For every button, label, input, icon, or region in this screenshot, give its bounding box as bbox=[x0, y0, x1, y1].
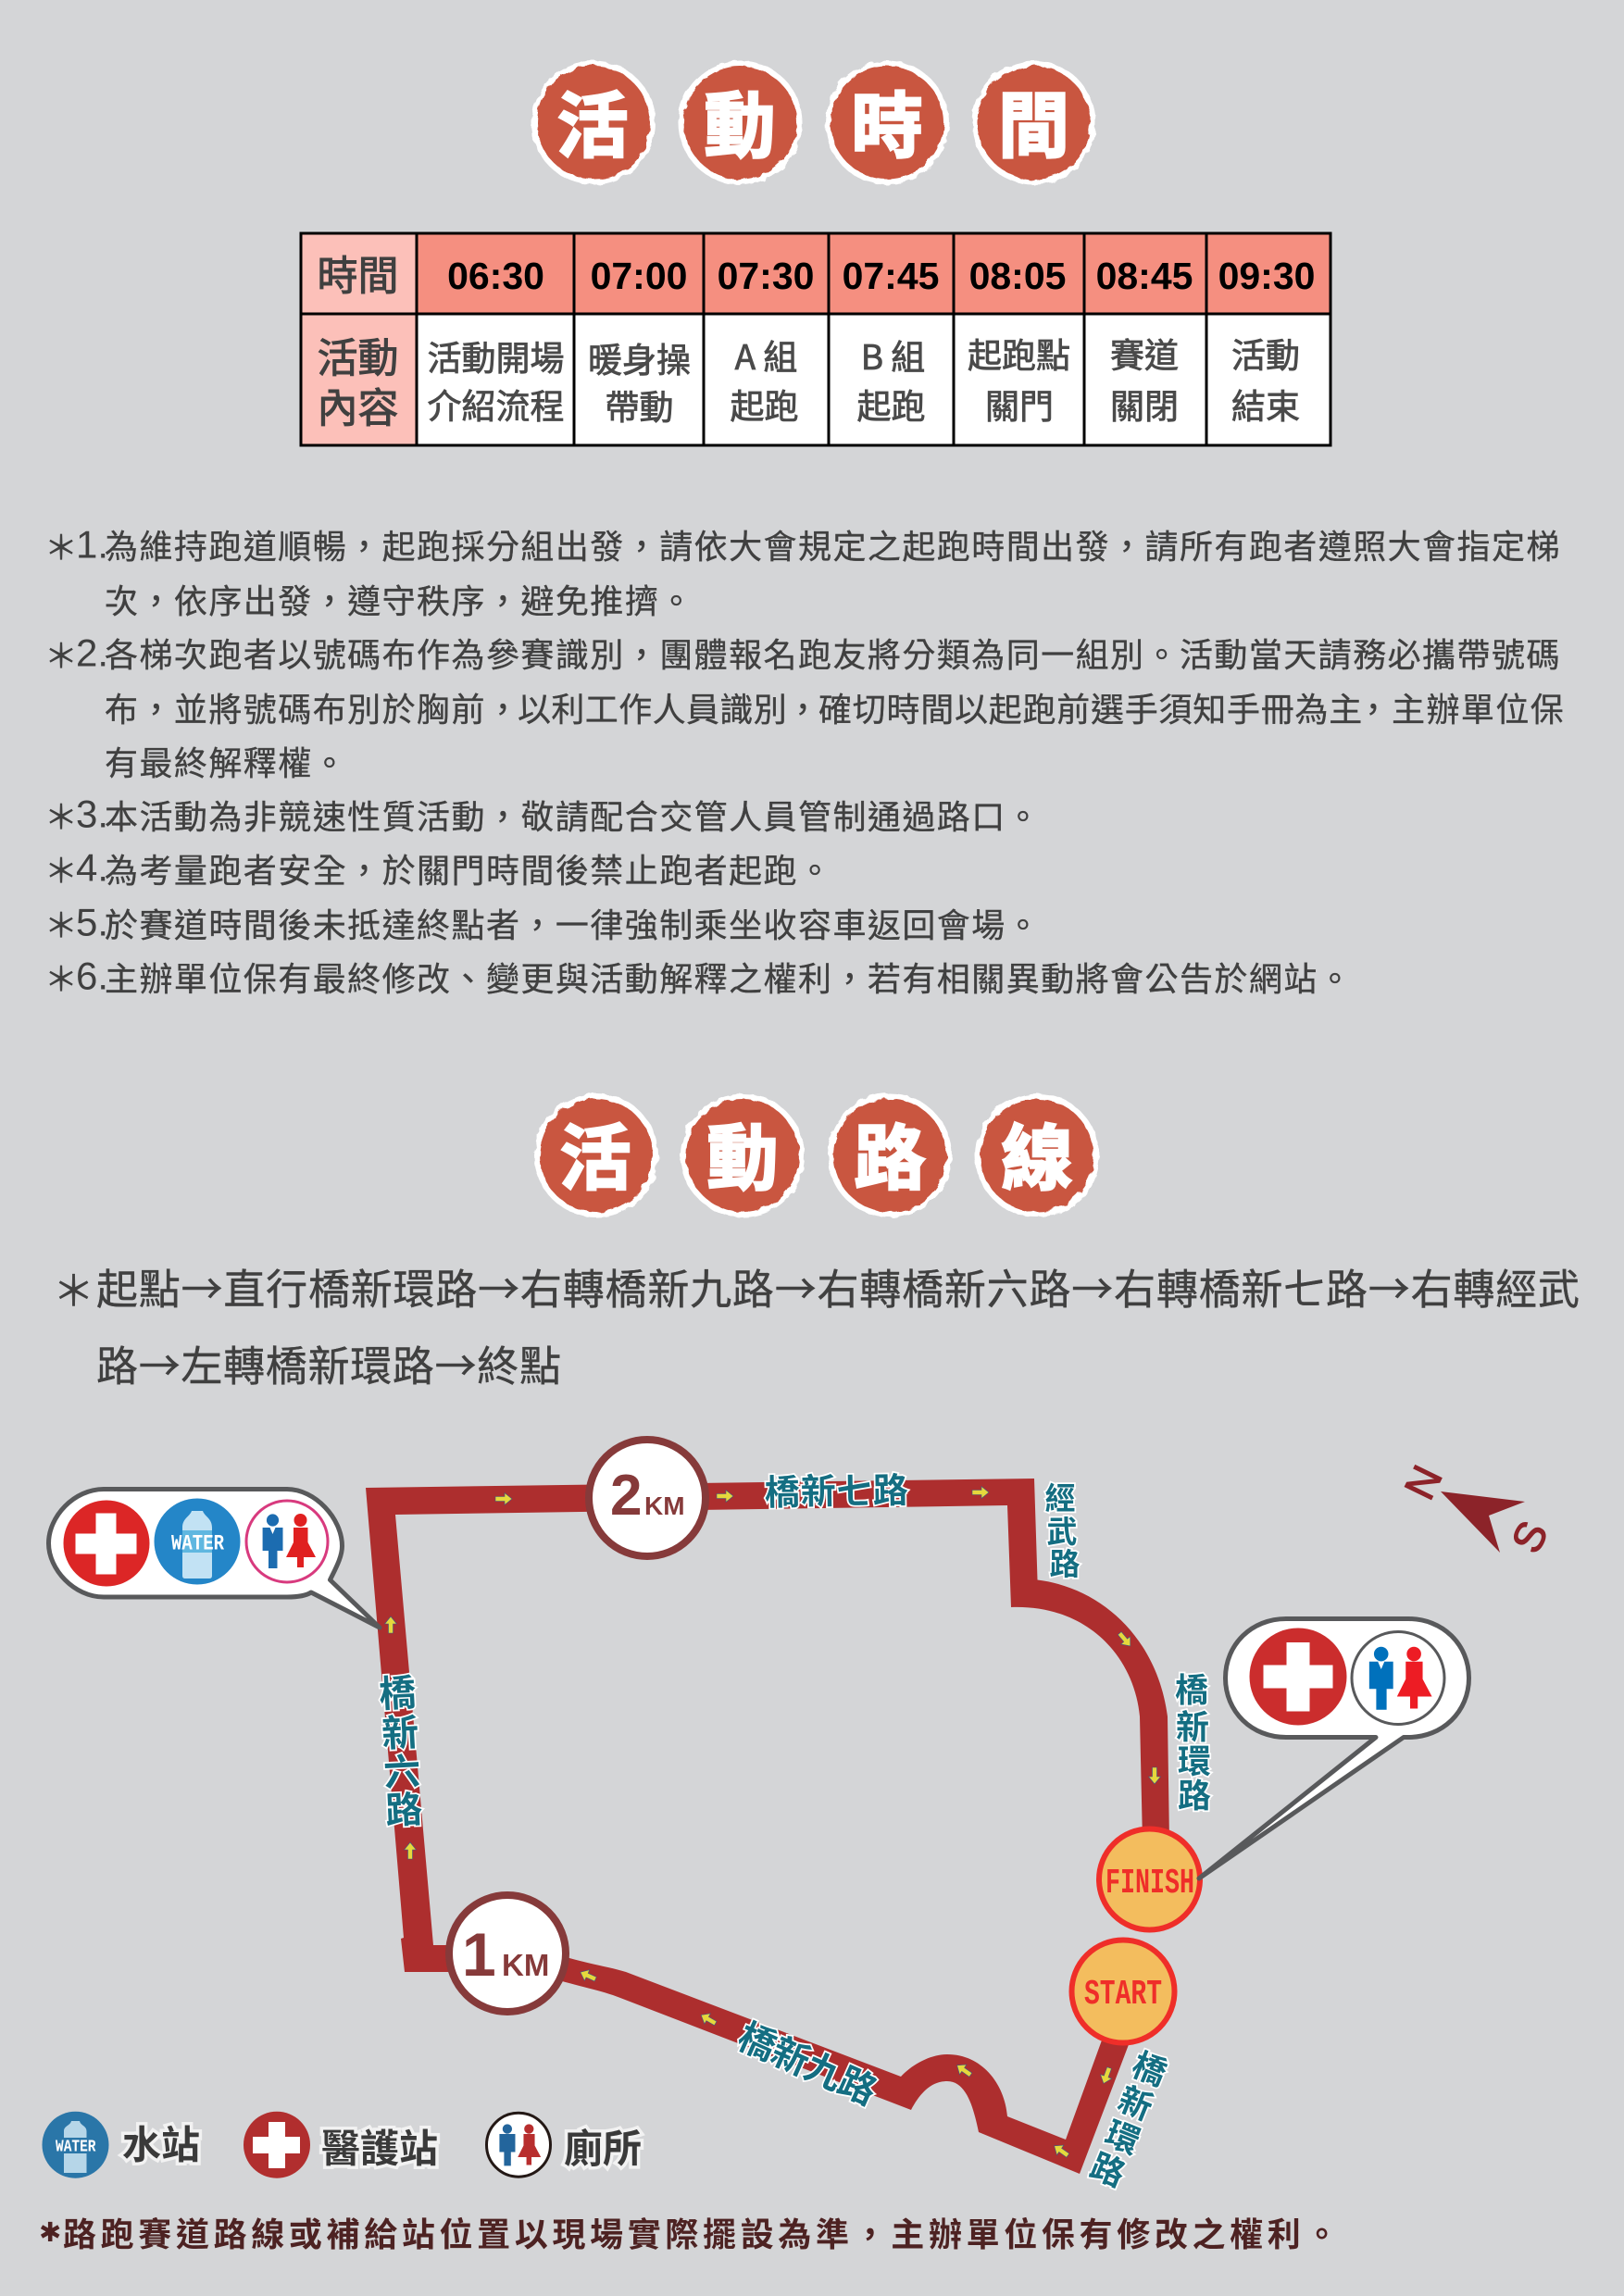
legend: medical station: 醫護站 bbox=[321, 2118, 438, 2174]
rules text block: 4. bbox=[76, 846, 108, 889]
rules text block: ＊ bbox=[44, 630, 79, 678]
icon: toilet bbox=[246, 1501, 328, 1582]
table times row: 09:30 bbox=[1218, 255, 1315, 297]
table activities row: 介紹流程 bbox=[428, 379, 565, 429]
table times row: 08:45 bbox=[1096, 255, 1193, 297]
rules text block: 確切時間以起跑前選手須知手冊為主 bbox=[818, 683, 1363, 731]
direction arrows bbox=[385, 1487, 1161, 2160]
rules text block: ＊ bbox=[44, 899, 79, 947]
schedule table bbox=[301, 233, 1331, 445]
table activities row: 帶動 bbox=[606, 380, 674, 430]
rules text block: 1. bbox=[76, 522, 108, 567]
title: 活動時間: 間 bbox=[998, 70, 1069, 172]
table header: 時間: 時間 bbox=[317, 243, 398, 302]
rules text block: 布，並將號碼布別於胸前， bbox=[105, 683, 520, 731]
marker: start bbox=[1072, 1940, 1174, 2042]
rules text block: 為維持跑道順暢，起跑採分組出發，請依大會規定之起跑時間出發，請所有跑者遵照大會指定梯 bbox=[105, 520, 1561, 568]
rules text block: 有最終解釋權。 bbox=[105, 737, 347, 785]
rules text block: ＊ bbox=[44, 953, 79, 1001]
marker: 2 km bbox=[589, 1440, 706, 1556]
rules text block: 次，依序出發，遵守秩序，避免推擠。 bbox=[105, 575, 694, 623]
marker: 1 km bbox=[449, 1895, 566, 2012]
legend: water station bbox=[43, 2112, 200, 2178]
table times row: 06:30 bbox=[447, 255, 544, 297]
road label: 橋新七路: 橋新七路 bbox=[764, 1462, 908, 1515]
rules text block: ， bbox=[786, 683, 820, 731]
rules text block: ， bbox=[1356, 683, 1391, 731]
table activities row: 活動開場 bbox=[428, 331, 565, 381]
marker: finish: FINISH bbox=[1106, 1864, 1194, 1903]
callout: medical, toilet bbox=[1199, 1618, 1468, 1878]
legend: toilet: 廁所 bbox=[564, 2118, 642, 2174]
route description text bbox=[53, 1255, 1580, 1392]
rules text block: ＊ bbox=[44, 791, 79, 839]
rules text block: 為考量跑者安全，於關門時間後禁止跑者起跑。 bbox=[105, 844, 832, 892]
table activities row: 起跑 bbox=[730, 379, 798, 429]
marker: 2 km: KM bbox=[644, 1491, 685, 1520]
table times row: 08:05 bbox=[969, 255, 1066, 297]
footnote: ✱ bbox=[39, 2216, 61, 2248]
road label: 橋新九路: 橋新九路 bbox=[731, 2007, 886, 2115]
rules text block: ＊ bbox=[44, 521, 79, 569]
legend: water station: WATER bbox=[56, 2139, 96, 2157]
route description text: ＊ bbox=[53, 1257, 94, 1318]
table times row bbox=[447, 255, 1315, 297]
marker: 2 km: 2 bbox=[610, 1464, 642, 1528]
rules text block: 6. bbox=[76, 954, 108, 998]
compass bbox=[1394, 1458, 1557, 1560]
title: 活動路線 bbox=[534, 1093, 1099, 1217]
title: 活動時間: 活 bbox=[557, 70, 628, 172]
rules text block: 於賽道時間後未抵達終點者，一律強制乘坐收容車返回會場。 bbox=[105, 899, 1041, 947]
icon: medical cross bbox=[63, 1500, 150, 1587]
rules text block: 各梯次跑者以號碼布作為參賽識別，團體報名跑友將分類為同一組別。活動當天請務必攜帶號碼 bbox=[105, 629, 1561, 677]
table activities row: 賽道 bbox=[1110, 328, 1179, 378]
compass: S bbox=[1502, 1514, 1557, 1560]
legend: toilet bbox=[487, 2113, 642, 2177]
icon: medical cross bbox=[1250, 1628, 1346, 1726]
table activities row: 關閉 bbox=[1110, 379, 1179, 429]
road label: 經武路: 經武路 bbox=[1044, 1474, 1080, 1584]
table times row: 07:30 bbox=[718, 255, 814, 297]
table header: 活動內容 bbox=[317, 325, 398, 434]
table activities row: 關門 bbox=[985, 379, 1054, 429]
table activities row: 起跑 bbox=[857, 379, 926, 429]
compass: N bbox=[1394, 1458, 1452, 1506]
legend: water station: 水站 bbox=[122, 2115, 200, 2170]
rules text block: 主辦單位保 bbox=[1392, 683, 1565, 731]
table times row: 07:45 bbox=[843, 255, 939, 297]
table activities row: A 組 bbox=[735, 330, 797, 380]
table activities row: 起跑點 bbox=[968, 328, 1070, 378]
table activities row: B 組 bbox=[861, 330, 925, 380]
road label: 橋新環路 (finish side): 橋新環路 bbox=[1175, 1664, 1211, 1817]
title: 活動路線: 線 bbox=[1002, 1102, 1072, 1205]
marker: 1 km: KM bbox=[502, 1948, 549, 1982]
callout: medical, water, toilet bbox=[48, 1489, 380, 1628]
icon: water bottle bbox=[154, 1498, 241, 1585]
rules text block: 主辦單位保有最終修改、變更與活動解釋之權利，若有相關異動將會公告於網站。 bbox=[105, 953, 1353, 1001]
legend: medical station bbox=[244, 2112, 438, 2178]
table activities row: 結束 bbox=[1231, 379, 1300, 429]
route description text: 路→左轉橋新環路→終點 bbox=[96, 1333, 561, 1392]
rules text block: 3. bbox=[76, 792, 108, 835]
table activities row: 活動 bbox=[1231, 328, 1300, 378]
road label: 橋新六路: 橋新六路 bbox=[378, 1663, 424, 1835]
road label: 橋新環路 (start side): 橋新環路 bbox=[1084, 2039, 1175, 2197]
title: 活動時間: 時 bbox=[852, 70, 922, 172]
marker: start: START bbox=[1084, 1975, 1162, 2015]
table header: 活動內容: 內容 bbox=[317, 375, 398, 434]
title: 活動時間 bbox=[531, 61, 1096, 185]
rules text block: 5. bbox=[76, 900, 108, 944]
icon: water bottle: WATER bbox=[171, 1531, 224, 1555]
route description text: 起點→直行橋新環路→右轉橋新九路→右轉橋新六路→右轉橋新七路→右轉經武 bbox=[96, 1255, 1580, 1316]
table activities row bbox=[428, 328, 1300, 430]
marker: finish bbox=[1099, 1829, 1200, 1929]
route map line bbox=[366, 1479, 1169, 2174]
rules text block: ＊ bbox=[44, 844, 79, 892]
title: 活動時間: 動 bbox=[704, 70, 776, 172]
table header: 活動內容: 活動 bbox=[317, 325, 398, 384]
title: 活動路線: 路 bbox=[854, 1102, 926, 1205]
marker: 1 km: 1 bbox=[462, 1920, 496, 1989]
title: 活動路線: 動 bbox=[707, 1102, 778, 1205]
rules text block: 2. bbox=[76, 631, 108, 674]
rules text block: 以利工作人員識別 bbox=[518, 683, 787, 731]
icon: toilet bbox=[1352, 1631, 1444, 1724]
rules text block: 本活動為非競速性質活動，敬請配合交管人員管制通過路口。 bbox=[105, 791, 1041, 839]
footnote: 路跑賽道路線或補給站位置以現場實際擺設為準，主辦單位保有修改之權利。 bbox=[63, 2208, 1343, 2256]
rules text block bbox=[44, 520, 1565, 1001]
table times row: 07:00 bbox=[591, 255, 687, 297]
table activities row: 暖身操 bbox=[588, 332, 691, 382]
title: 活動路線: 活 bbox=[559, 1102, 631, 1205]
